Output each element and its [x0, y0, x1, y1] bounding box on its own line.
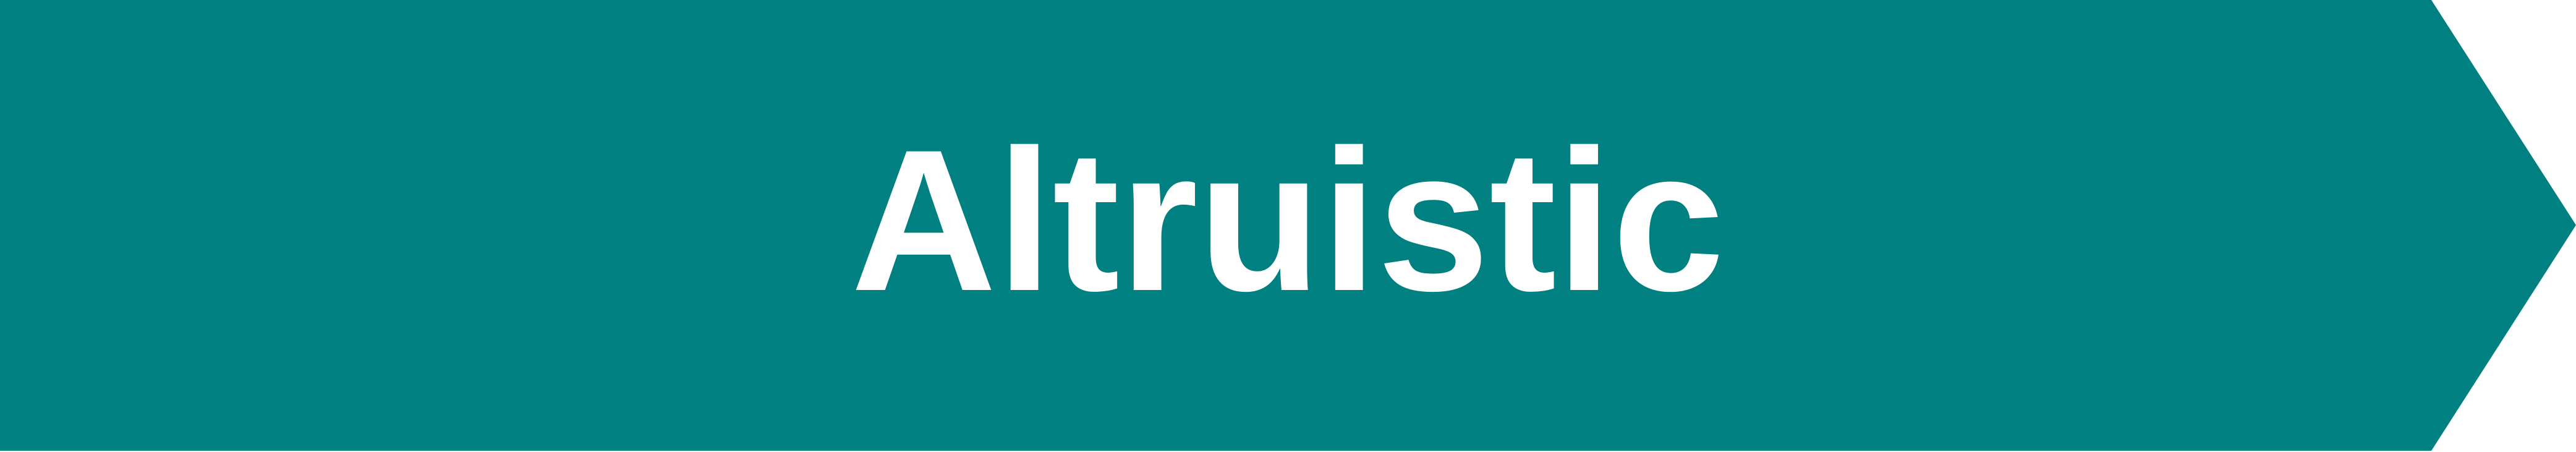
- title: Altruistic: [851, 108, 1724, 333]
